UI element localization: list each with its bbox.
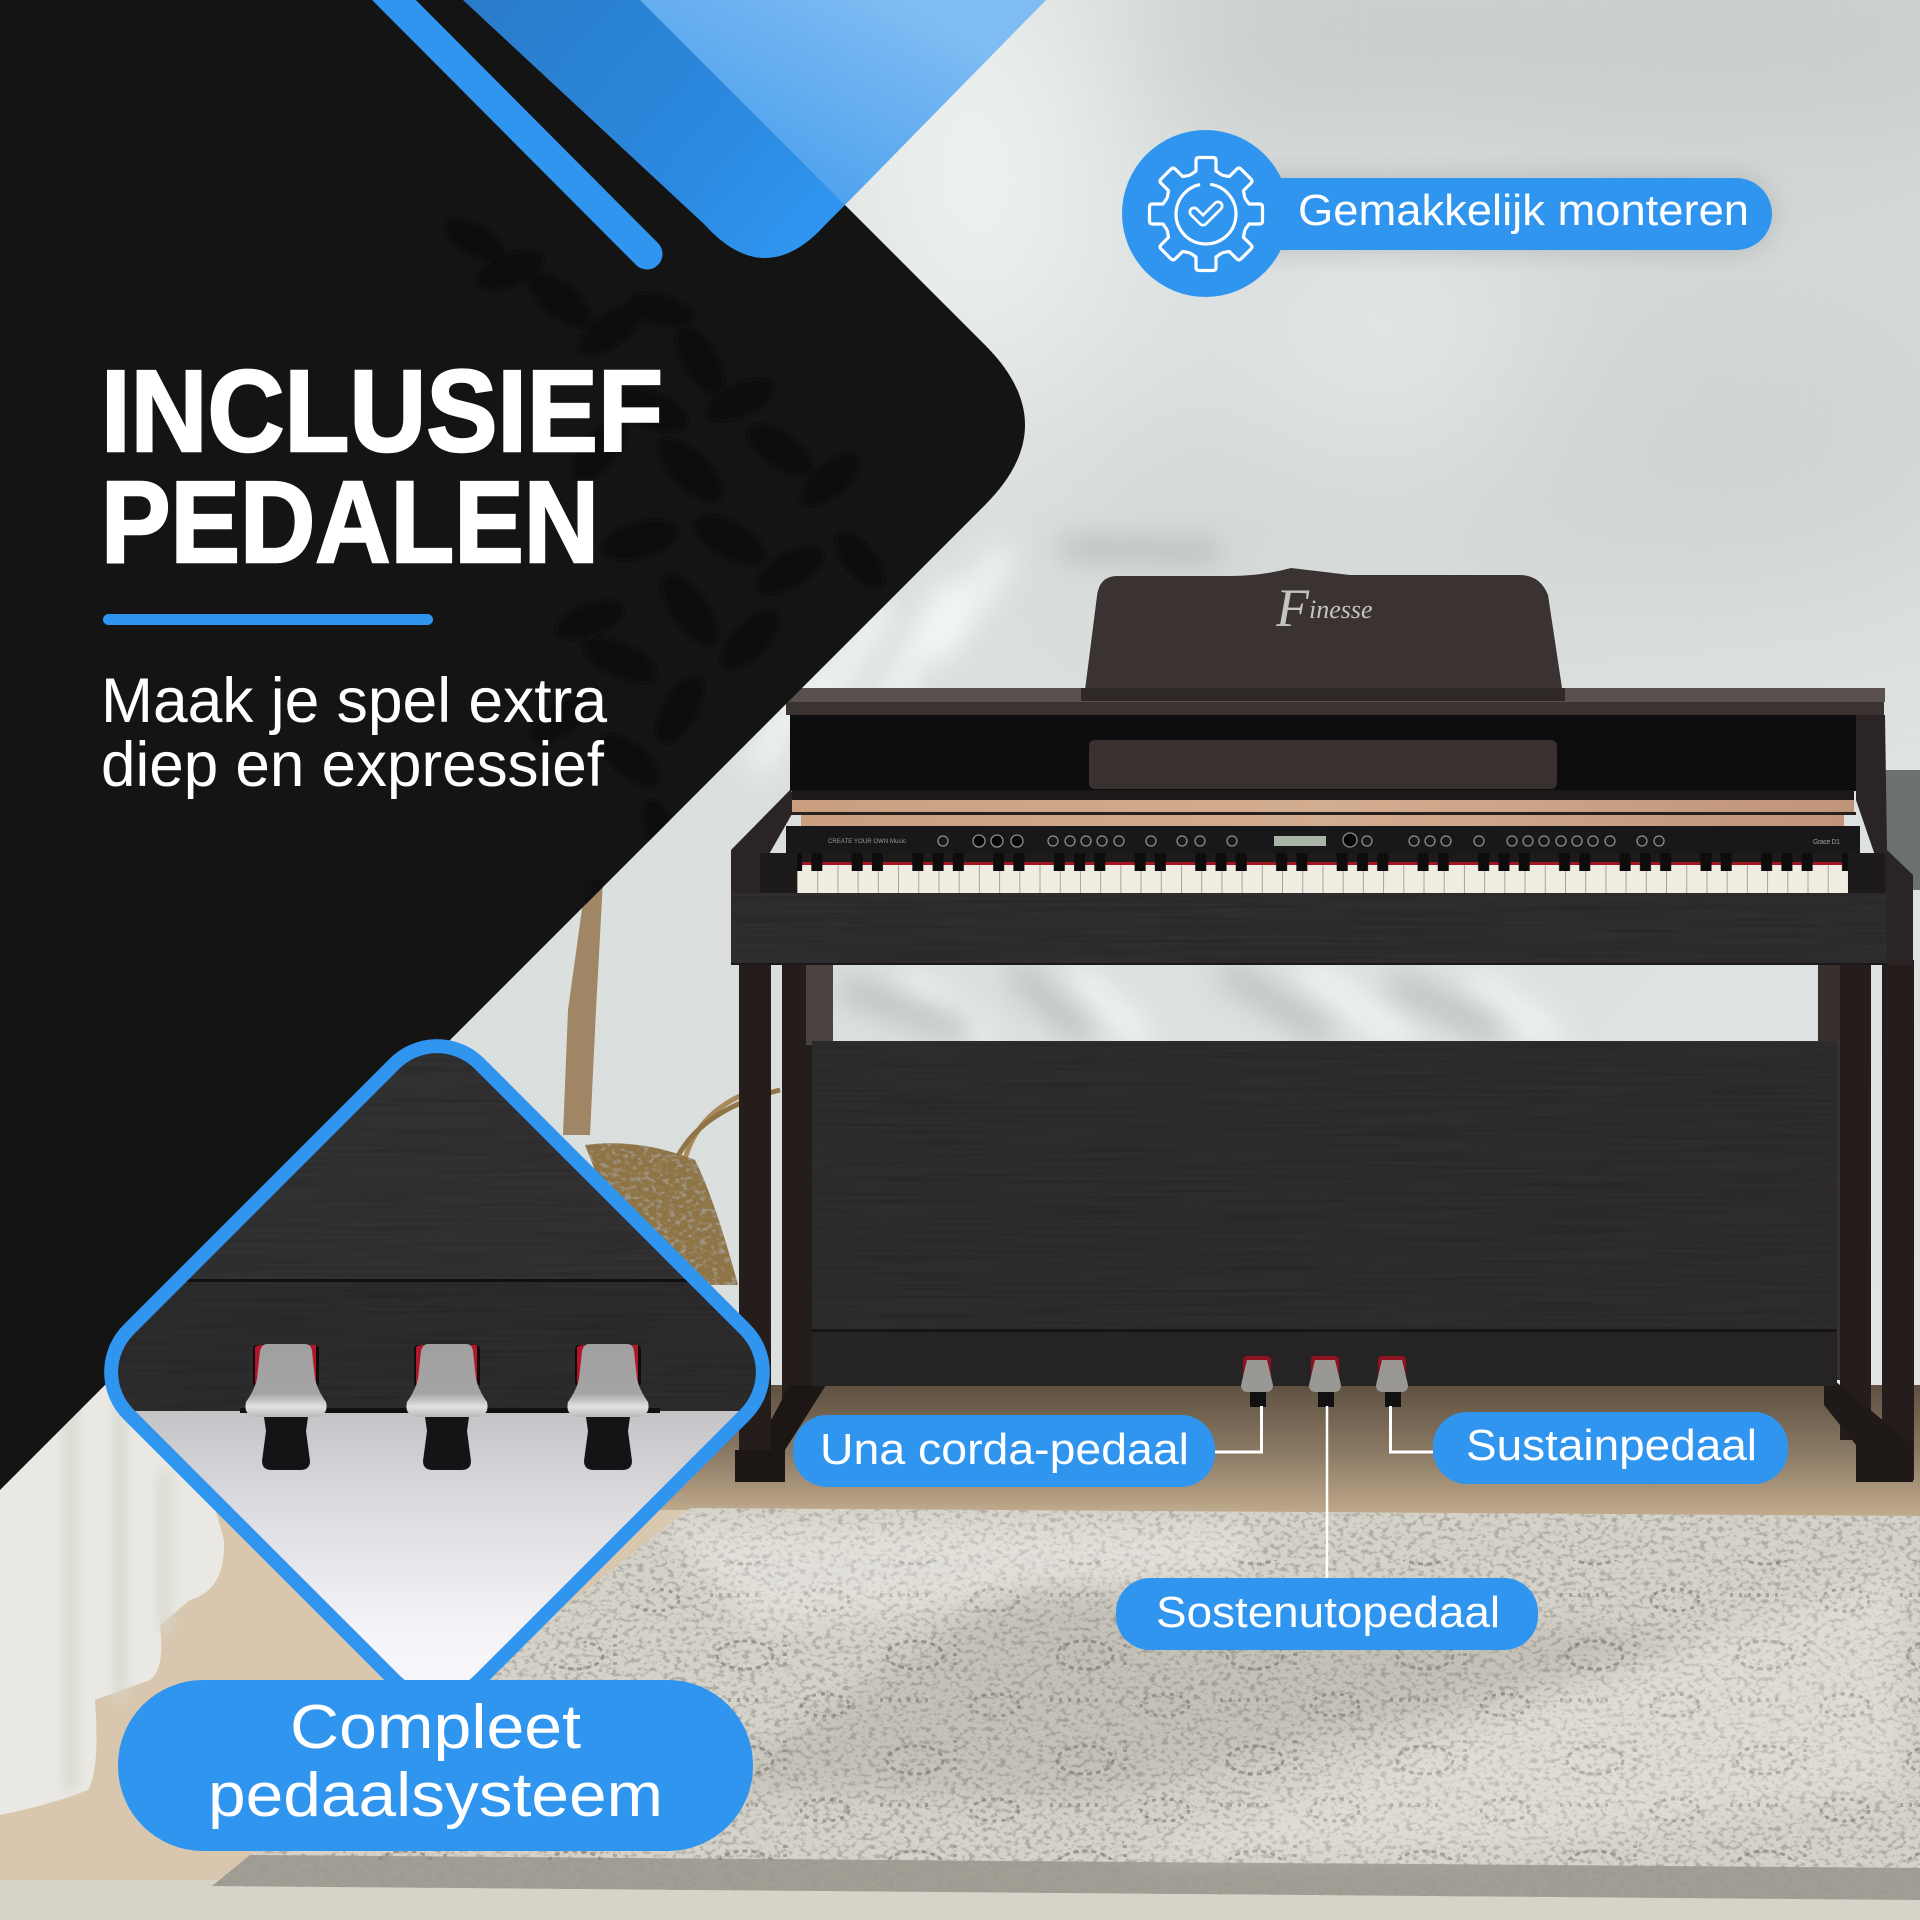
lower panel xyxy=(812,1041,1837,1386)
rug xyxy=(212,1508,1920,1900)
label: sostenutopedaal xyxy=(1116,1578,1538,1650)
title xyxy=(101,346,663,587)
callout: compleet pedaalsysteem: Compleet xyxy=(290,1693,581,1762)
piano xyxy=(731,568,1914,1482)
control panel: Grace D1 xyxy=(1813,839,1840,846)
pedal right xyxy=(567,1344,649,1470)
control panel: CREATE YOUR OWN Music xyxy=(828,839,906,845)
inset: pedal close-up xyxy=(104,1039,770,1680)
piano legs xyxy=(735,960,1914,1482)
curtain xyxy=(0,1300,224,1815)
music rest xyxy=(1081,568,1565,701)
pedal middle xyxy=(406,1344,488,1470)
label: una corda-pedaal xyxy=(793,1415,1215,1487)
title: PEDALEN xyxy=(101,457,599,587)
floor xyxy=(0,1385,1920,1920)
callout: compleet pedaalsysteem: pedaalsysteem xyxy=(208,1761,663,1830)
keyslip xyxy=(731,893,1887,965)
connector: sostenuto xyxy=(1326,1406,1328,1578)
badge: gemakkelijk monteren: Gemakkelijk monteren xyxy=(1298,186,1749,235)
decorative blue triangle xyxy=(463,0,1046,258)
logo: Finesse: F xyxy=(1276,578,1309,638)
plant silhouette xyxy=(438,210,893,1040)
icon: gear with check xyxy=(1150,158,1262,270)
title: INCLUSIEF xyxy=(101,346,663,476)
label: sostenutopedaal: Sostenutopedaal xyxy=(1156,1588,1500,1637)
connector: una corda xyxy=(1215,1406,1262,1452)
mini pedals xyxy=(1241,1356,1408,1407)
logo: Finesse: inesse xyxy=(1309,595,1373,624)
connector: sustain xyxy=(1390,1406,1433,1452)
pedal left xyxy=(245,1344,327,1470)
subtitle: Maak je spel extra xyxy=(101,666,608,736)
callout: compleet pedaalsysteem xyxy=(118,1680,753,1851)
keyboard xyxy=(760,853,1885,895)
subtitle: diep en expressief xyxy=(101,730,604,800)
title divider xyxy=(103,614,433,625)
label: sustainpedaal: Sustainpedaal xyxy=(1466,1421,1757,1470)
label: sustainpedaal xyxy=(1433,1412,1788,1484)
badge: gemakkelijk monteren xyxy=(1122,130,1772,297)
decorative blue stripe xyxy=(380,0,647,254)
plant and basket xyxy=(563,880,780,1285)
control panel xyxy=(828,833,1840,847)
subtitle xyxy=(101,666,608,800)
piano body xyxy=(731,688,1913,965)
label: una corda-pedaal: Una corda-pedaal xyxy=(820,1425,1189,1474)
panel: black diagonal background xyxy=(0,0,1025,1490)
